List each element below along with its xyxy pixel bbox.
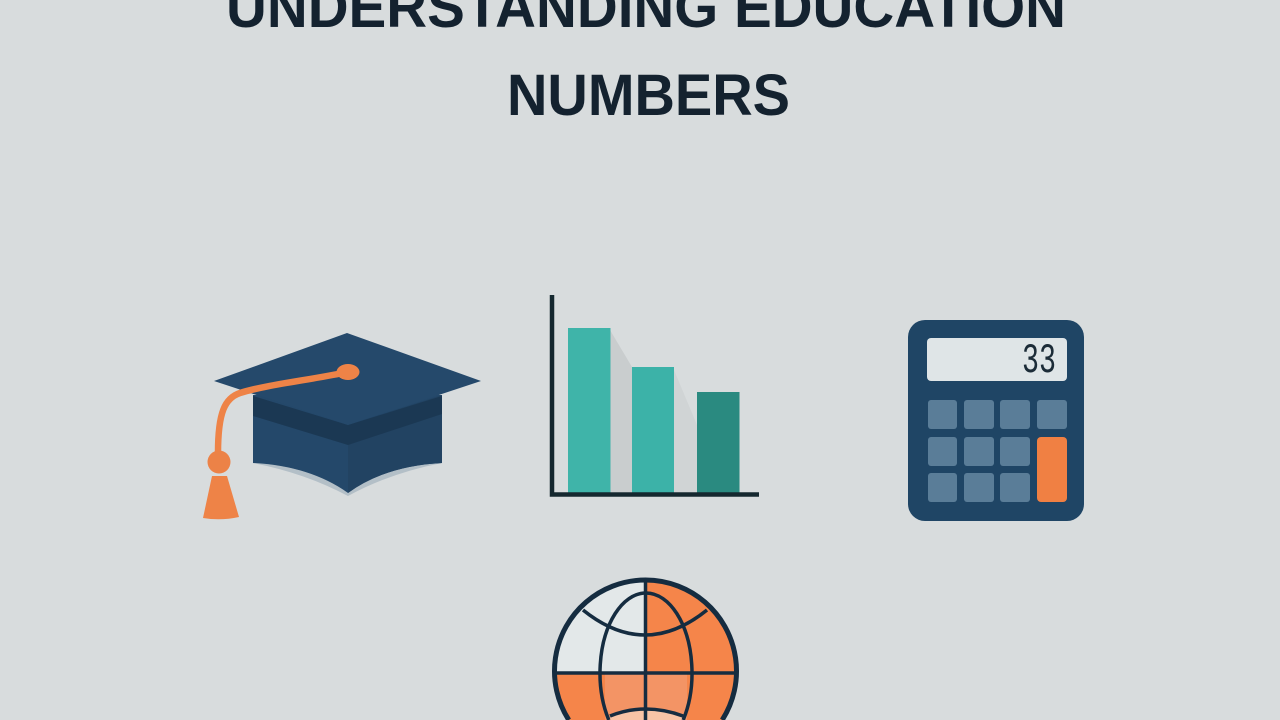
icon: globe: [554, 578, 737, 720]
display number: 33: [1022, 337, 1056, 385]
icon: calculator: [908, 320, 1084, 521]
bar: medium: [632, 367, 674, 493]
calculator keys: [928, 400, 1067, 502]
calculator display: [927, 338, 1067, 381]
bar chart: [552, 295, 759, 494]
title: [226, 0, 1066, 128]
bar: tall: [568, 328, 610, 493]
chart axes: [552, 295, 759, 494]
orange key: [1037, 437, 1067, 502]
title: NUMBERS: [507, 63, 790, 128]
icon: graduation cap: [203, 333, 481, 519]
bar: short: [697, 392, 740, 493]
